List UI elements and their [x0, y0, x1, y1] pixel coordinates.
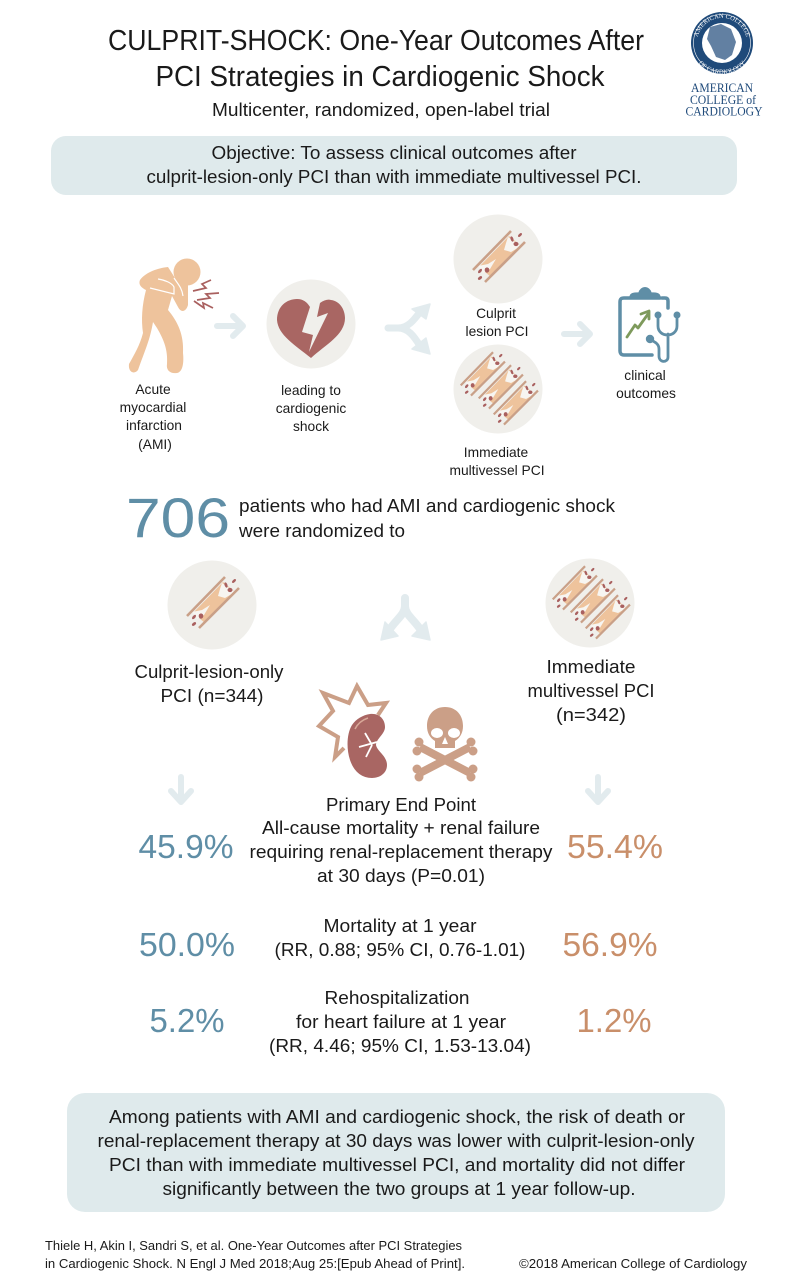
text: mortality — [274, 915, 526, 960]
label: clinical outcomes: clinical — [624, 368, 666, 383]
ACC logo: OF CARDIOLOGY — [699, 60, 744, 74]
ACC logo: COLLEGE of — [690, 93, 757, 107]
text: mortality: Mortality at 1 year — [324, 915, 476, 936]
text: rehospitalization — [269, 987, 531, 1056]
arrow: split to two strategies — [388, 304, 430, 354]
label: AMI: (AMI) — [138, 437, 172, 452]
panel: conclusion — [67, 1093, 725, 1212]
title: CULPRIT-SHOCK: One-Year Outcomes After — [108, 25, 644, 57]
icon: culprit vessel — [168, 560, 256, 650]
label: culprit arm: Culprit-lesion-only — [134, 661, 284, 682]
ACC logo — [686, 12, 762, 118]
text: primary end point: All-cause mortality + renal failure — [262, 817, 540, 838]
icon: person with chest pain — [129, 258, 200, 373]
label: AMI: myocardial — [120, 400, 186, 415]
icon: clipboard and stethoscope — [620, 288, 680, 361]
text: randomized: were randomized to — [238, 520, 405, 541]
stat: 50.0%: 50.0% — [139, 926, 235, 963]
text: rehospitalization: for heart failure at 1 year — [296, 1011, 506, 1032]
text: randomized — [238, 495, 616, 541]
label: leading to cardiogenic shock: shock — [293, 419, 329, 434]
label: immediate multivessel PCI: Immediate — [464, 445, 529, 460]
panel: objective: Objective: To assess clinical outcomes after — [212, 142, 576, 163]
arrow: split downward — [381, 598, 430, 640]
label: leading to cardiogenic shock: leading to — [281, 383, 341, 398]
copyright: ©2018 American College of Cardiology — [519, 1256, 747, 1271]
label: culprit lesion PCI: Culprit — [476, 306, 516, 321]
arrow: right down — [588, 777, 608, 802]
label: immediate multivessel PCI: multivessel PCI — [449, 463, 545, 478]
icon: pain bolts — [193, 280, 219, 308]
citation: Thiele H, Akin I, Sandri S, et al. One-Year Outcomes after PCI Strategies — [45, 1238, 462, 1253]
label: culprit lesion PCI — [466, 306, 528, 339]
text: primary end point: requiring renal-replacement therapy — [250, 841, 553, 862]
label: AMI: Acute — [135, 382, 171, 397]
title: PCI Strategies in Cardiogenic Shock — [156, 61, 605, 93]
icon: culprit vessel — [454, 214, 542, 304]
icon: multivessel — [546, 558, 634, 648]
stat: 45.9%: 45.9% — [138, 828, 234, 865]
text: primary end point — [250, 794, 553, 886]
panel: conclusion: PCI than with immediate multivessel PCI, and mortality did not differ — [109, 1154, 685, 1175]
panel: conclusion: Among patients with AMI and cardiogenic shock, the risk of death or — [109, 1106, 685, 1127]
citation: in Cardiogenic Shock. N Engl J Med 2018;Aug 25:[Epub Ahead of Print]. — [45, 1256, 465, 1271]
panel: objective: culprit-lesion-only PCI than with immediate multivessel PCI. — [146, 166, 642, 187]
label: AMI — [120, 382, 186, 452]
text: primary end point: Primary End Point — [326, 794, 477, 815]
panel: conclusion: renal-replacement therapy at 30 days was lower with culprit-lesion-only — [98, 1130, 695, 1151]
icon: skull and crossbones — [412, 707, 478, 782]
label: leading to cardiogenic shock — [276, 383, 346, 434]
label: AMI: infarction — [126, 418, 182, 433]
text: mortality: (RR, 0.88; 95% CI, 0.76-1.01) — [274, 939, 526, 960]
label: clinical outcomes: outcomes — [616, 386, 676, 401]
label: multivessel arm: Immediate — [546, 656, 636, 677]
arrow — [564, 324, 590, 344]
stat: 1.2%: 1.2% — [576, 1002, 652, 1039]
label: multivessel arm: (n=342) — [556, 704, 626, 725]
label: culprit lesion PCI: lesion PCI — [466, 324, 528, 339]
arrow: left down — [171, 777, 191, 802]
citation — [45, 1238, 465, 1271]
label: immediate multivessel PCI — [449, 445, 545, 478]
label: multivessel arm — [528, 656, 654, 725]
subtitle: Multicenter, randomized, open-label trial — [212, 99, 550, 120]
icon: multivessel — [454, 344, 542, 434]
icon: broken heart — [266, 280, 356, 368]
label: leading to cardiogenic shock: cardiogenic — [276, 401, 346, 416]
label: clinical outcomes — [616, 368, 676, 401]
text: rehospitalization: (RR, 4.46; 95% CI, 1.53-13.04) — [269, 1035, 531, 1056]
title — [108, 25, 644, 93]
ACC logo: CARDIOLOGY — [686, 104, 762, 118]
big number 706: 706 — [126, 486, 230, 549]
text: rehospitalization: Rehospitalization — [324, 987, 470, 1008]
label: culprit arm: PCI (n=344) — [160, 685, 264, 706]
icon: kidney with burst — [319, 686, 387, 778]
arrow — [217, 316, 243, 336]
stat: 55.4%: 55.4% — [567, 828, 663, 865]
panel: objective — [51, 136, 737, 195]
panel: conclusion: significantly between the two groups at 1 year follow-up. — [162, 1178, 636, 1199]
ACC logo: AMERICAN — [691, 81, 753, 95]
text: randomized: patients who had AMI and cardiogenic shock — [239, 495, 616, 516]
stat: 5.2%: 5.2% — [150, 1002, 224, 1039]
label: multivessel arm: multivessel PCI — [528, 680, 654, 701]
text: primary end point: at 30 days (P=0.01) — [317, 865, 485, 886]
stat: 56.9%: 56.9% — [562, 926, 658, 963]
ACC logo: AMERICAN COLLEGE — [694, 14, 750, 37]
label: culprit arm — [134, 661, 284, 706]
